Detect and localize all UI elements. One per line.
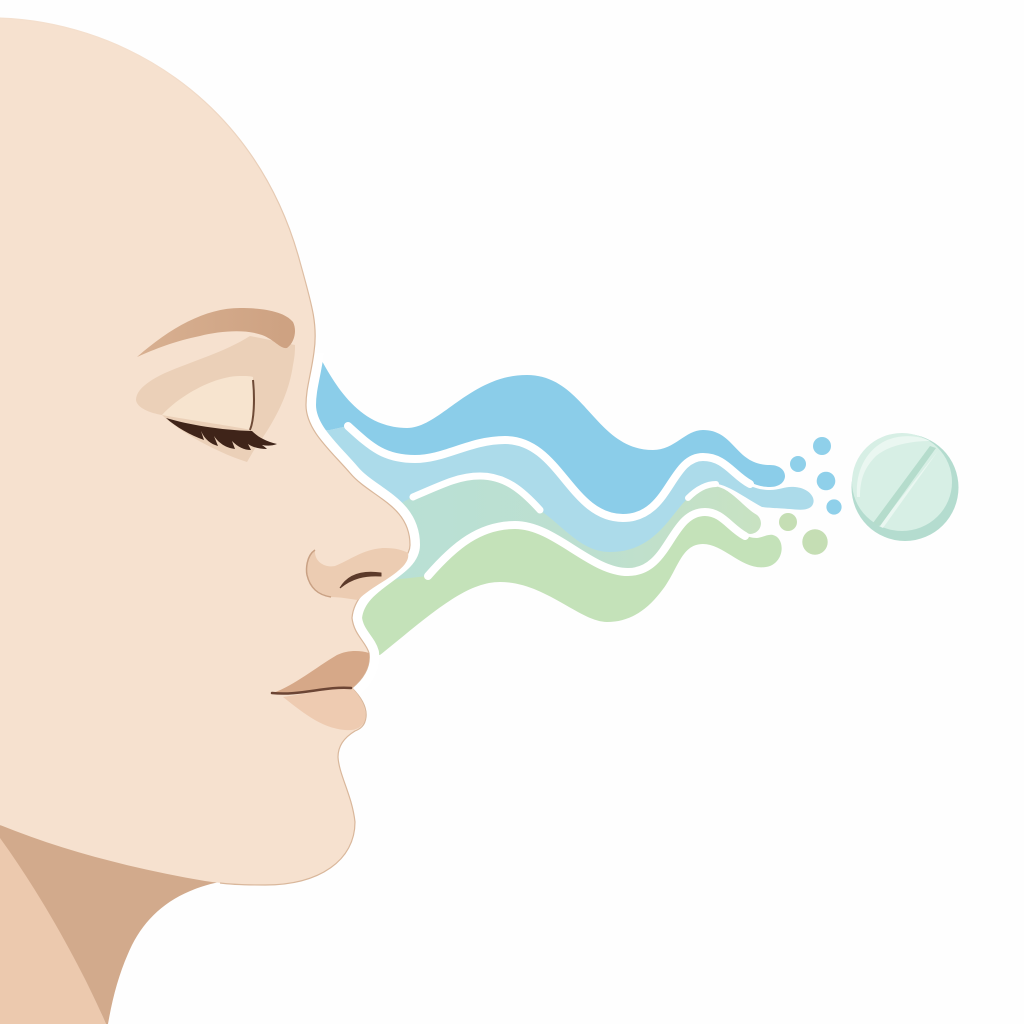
nostril	[340, 572, 381, 588]
pill base	[852, 434, 958, 541]
particles	[779, 437, 842, 555]
eyelid crease	[250, 380, 254, 430]
eyelid	[162, 376, 253, 430]
pill score line	[873, 446, 936, 526]
green particles	[779, 513, 828, 555]
wave: top blue band	[295, 361, 785, 518]
pill highlight	[857, 436, 930, 497]
face halo	[306, 352, 410, 688]
lower lip	[283, 688, 365, 730]
pill score line highlight	[879, 451, 938, 528]
airflow line: short right	[688, 484, 716, 498]
wave: lower green band	[300, 512, 782, 660]
wave: pale teal-green band	[300, 470, 761, 590]
nose wing	[307, 548, 408, 600]
blue particles	[790, 437, 842, 515]
nose wing edge	[307, 550, 331, 597]
neck: shadow	[0, 825, 230, 1024]
airflow line: middle	[413, 476, 540, 510]
mouth line	[272, 688, 351, 694]
airflow line: lower	[428, 512, 745, 576]
eyelashes	[166, 418, 277, 450]
neck: light	[0, 830, 106, 1024]
pill face	[852, 433, 952, 531]
airflow line: upper	[348, 426, 750, 518]
upper lip	[273, 651, 369, 693]
face outline	[0, 18, 410, 885]
pill	[852, 433, 958, 541]
scent waves	[295, 361, 814, 660]
head and face	[0, 18, 410, 1024]
eye shadow	[136, 336, 295, 462]
eyebrow	[137, 308, 295, 357]
face shape	[0, 18, 410, 885]
wave: light blue band	[300, 426, 814, 552]
